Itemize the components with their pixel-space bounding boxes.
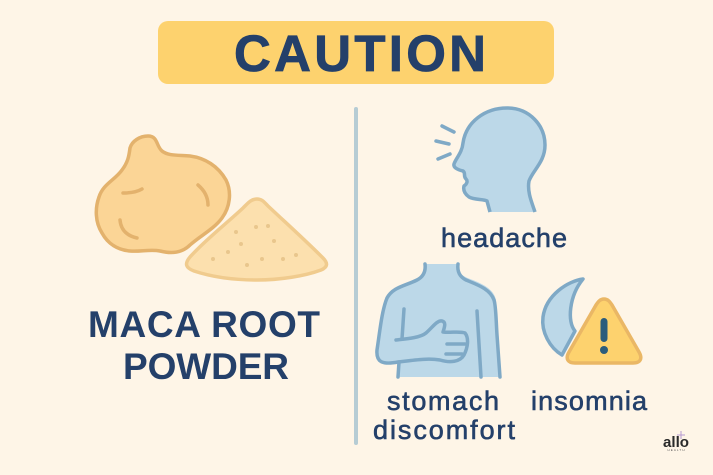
- title banner: caution: CAUTION: [234, 25, 486, 82]
- icon: maca root: [96, 136, 229, 253]
- label: maca root powder: MACA ROOT: [88, 304, 320, 345]
- icon: maca powder pile: [187, 199, 327, 280]
- label: headache: headache: [441, 223, 567, 253]
- vertical divider: [354, 107, 358, 445]
- label: stomach discomfort: stomach: [387, 386, 499, 416]
- icon: stomach discomfort torso: [377, 264, 501, 377]
- label: maca root powder: [88, 304, 320, 387]
- icon: warning triangle: [567, 299, 641, 363]
- title banner: caution: [158, 21, 554, 84]
- icon: crescent moon: [543, 279, 583, 355]
- label: stomach discomfort: discomfort: [373, 415, 515, 445]
- icon: headache head profile: [436, 108, 545, 212]
- label: stomach discomfort: [373, 386, 515, 445]
- label: insomnia: insomnia: [531, 386, 648, 416]
- logo: allo health: allo: [663, 434, 689, 451]
- logo: allo health: HEALTH: [668, 448, 684, 452]
- label: maca root powder: POWDER: [123, 346, 289, 387]
